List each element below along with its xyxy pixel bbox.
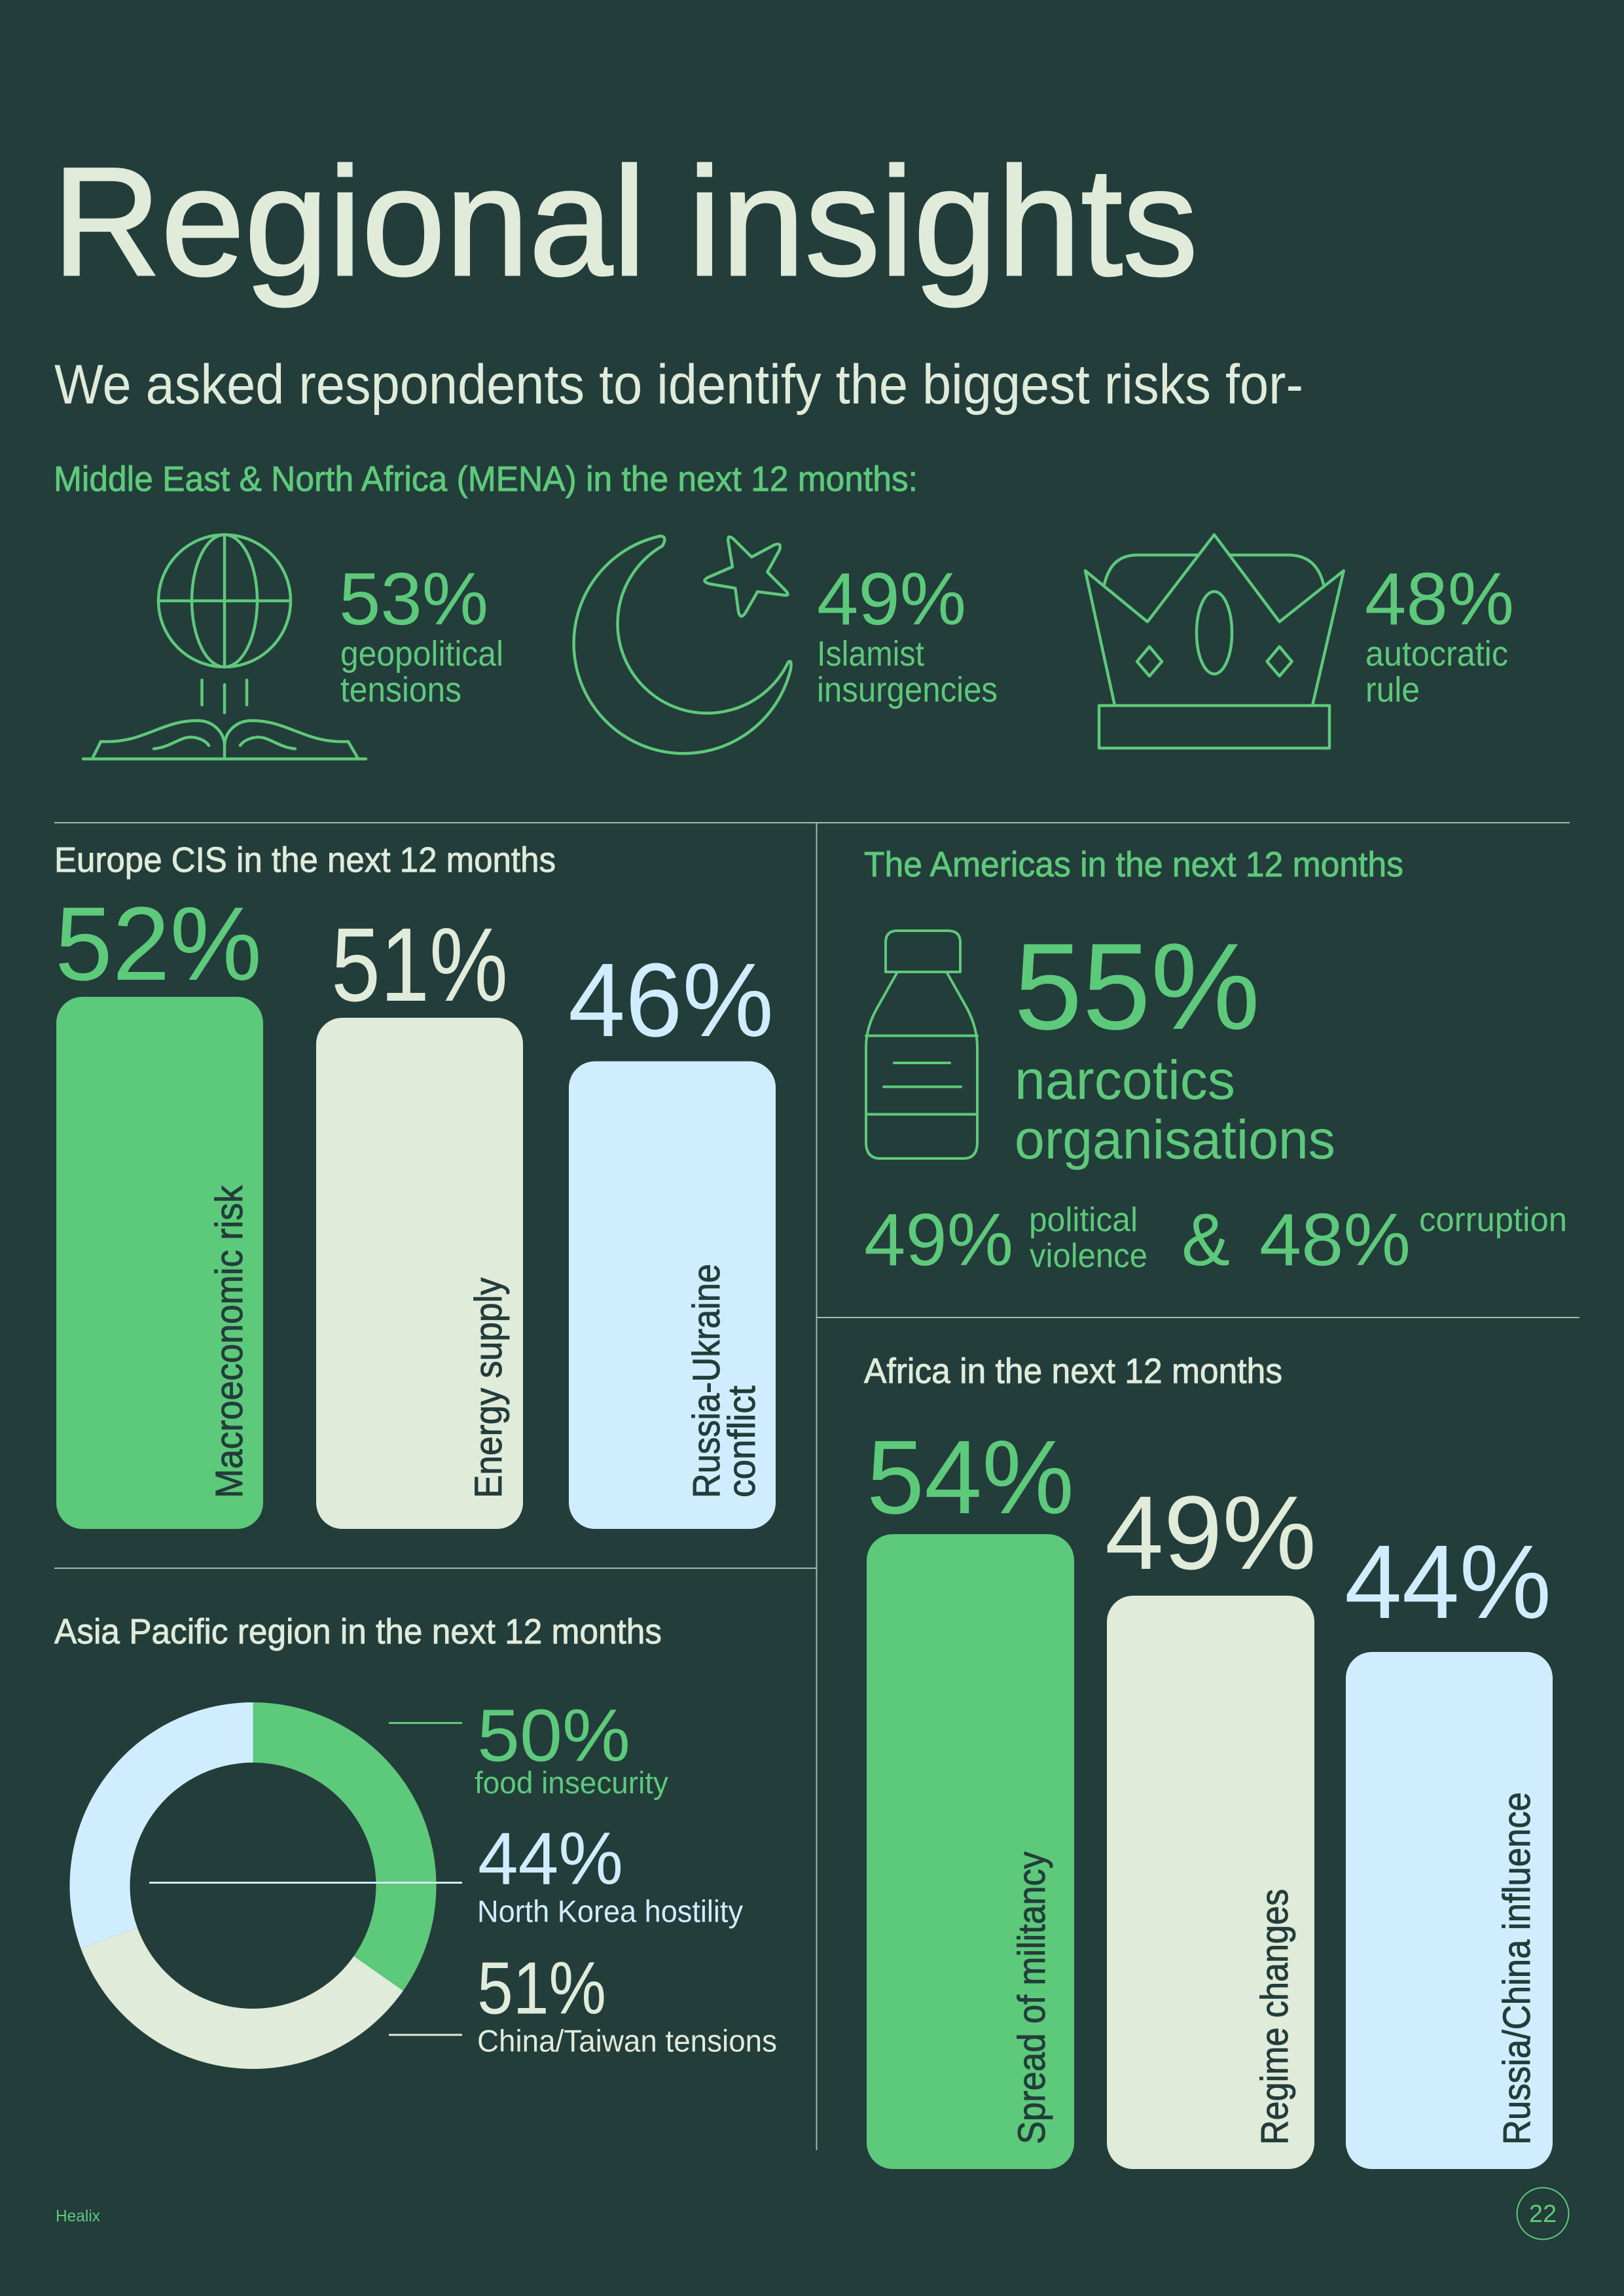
subtitle: We asked respondents to identify the biggest risks for- (54, 353, 1303, 416)
footer brand: Healix (56, 2207, 100, 2225)
heading: MENA: Middle East & North Africa (MENA) in the next 12 months: (54, 459, 918, 499)
stat: 53% geopolitical tensions (339, 558, 503, 709)
bar: Russia/China influence 44%: 44% (1344, 1523, 1551, 1640)
stat: 53% geopolitical tensions: 53% (339, 558, 488, 640)
ampersand: & (1182, 1198, 1230, 1281)
bar: Macroeconomic risk 52%: 52% (55, 885, 262, 1002)
title: Regional insights (52, 135, 1198, 308)
stat: 50% food insecurity (475, 1694, 668, 1800)
stat: 44% North Korea hostility (477, 1817, 743, 1928)
stat: 44% North Korea hostility: North Korea hostility (477, 1894, 743, 1928)
stat: 48% corruption: 48% (1259, 1198, 1411, 1281)
panel: Africa (864, 1352, 1553, 2169)
stat: 48% corruption (1259, 1198, 1567, 1281)
stat: 55% narcotics organisations (1014, 918, 1335, 1170)
panel: Americas (864, 845, 1567, 1281)
stat: 49% Islamist insurgencies: Islamist (817, 634, 924, 673)
stat: 51% China/Taiwan tensions (477, 1946, 777, 2058)
heading: Europe CIS: Europe CIS in the next 12 months (54, 840, 556, 880)
stat: 49% Islamist insurgencies (817, 558, 998, 709)
stat: 49% Islamist insurgencies: insurgencies (817, 670, 998, 709)
heading: Africa: Africa in the next 12 months (864, 1352, 1282, 1391)
icon: crown (1085, 535, 1344, 748)
bar: Energy supply 51%: Energy supply (467, 1278, 510, 1498)
stat: 50% food insecurity: food insecurity (475, 1765, 668, 1800)
bar: Energy supply 51% (316, 906, 523, 1529)
stat: 50% food insecurity: 50% (477, 1694, 630, 1776)
panel: Asia Pacific (54, 1612, 777, 2069)
stat: 53% geopolitical tensions: geopolitical (340, 634, 503, 673)
bar: Russia/China influence 44%: Russia/China influence (1496, 1792, 1538, 2145)
bar: Regime changes 49%: Regime changes (1254, 1889, 1296, 2145)
bar: Russia-Ukraine conflict 46%: 46% (568, 941, 774, 1058)
bar: Spread of militancy 54% (867, 1418, 1074, 2169)
stat: 49% political violence: political (1029, 1201, 1138, 1239)
bar: Macroeconomic risk 52% (55, 885, 263, 1529)
page number: 22 (1529, 2200, 1557, 2228)
stat: 44% North Korea hostility: 44% (478, 1817, 623, 1899)
bar: Russia-Ukraine conflict 46%: conflict (721, 1386, 763, 1498)
bar: Spread of militancy 54%: 54% (867, 1418, 1074, 1535)
stat: 51% China/Taiwan tensions: China/Taiwan tensions (477, 2024, 777, 2058)
stat: 48% autocratic rule: autocratic (1365, 634, 1508, 673)
donut chart (70, 1702, 462, 2069)
stat: 48% autocratic rule (1365, 558, 1514, 709)
panel: Europe CIS (54, 840, 776, 1529)
bar: Regime changes 49% (1105, 1474, 1316, 2169)
stat: 55% narcotics organisations: 55% (1014, 918, 1260, 1055)
stat: 48% autocratic rule: rule (1365, 670, 1420, 709)
stat: 48% corruption: corruption (1419, 1201, 1567, 1239)
panel: MENA (54, 459, 1514, 759)
stat: 49% political violence: violence (1030, 1237, 1147, 1275)
icon: crescent and star (574, 536, 791, 753)
icon: globe and book (83, 535, 366, 759)
bar: Russia-Ukraine conflict 46%: Russia-Ukraine (685, 1264, 728, 1498)
bar: Russia/China influence 44% (1344, 1523, 1553, 2169)
stat: 49% political violence: 49% (864, 1198, 1013, 1281)
bar: Regime changes 49%: 49% (1105, 1474, 1316, 1591)
stat: 49% Islamist insurgencies: 49% (817, 558, 966, 640)
bar: Russia-Ukraine conflict 46% (568, 941, 776, 1529)
stat: 48% autocratic rule: 48% (1365, 558, 1514, 640)
stat: 55% narcotics organisations: organisations (1015, 1109, 1335, 1170)
stat: 51% China/Taiwan tensions: 51% (477, 1946, 606, 2029)
icon: bottle (866, 931, 977, 1158)
heading: Americas: The Americas in the next 12 months (864, 845, 1403, 884)
stat: 53% geopolitical tensions: tensions (340, 670, 461, 709)
page number (1517, 2187, 1568, 2240)
heading: Asia Pacific: Asia Pacific region in the next 12 months (54, 1612, 662, 1651)
bar: Macroeconomic risk 52%: Macroeconomic risk (208, 1185, 251, 1498)
stat: 49% political violence (864, 1198, 1147, 1281)
stat: 55% narcotics organisations: narcotics (1015, 1049, 1235, 1111)
bar: Energy supply 51%: 51% (331, 906, 508, 1023)
bar: Spread of militancy 54%: Spread of militancy (1011, 1852, 1053, 2144)
